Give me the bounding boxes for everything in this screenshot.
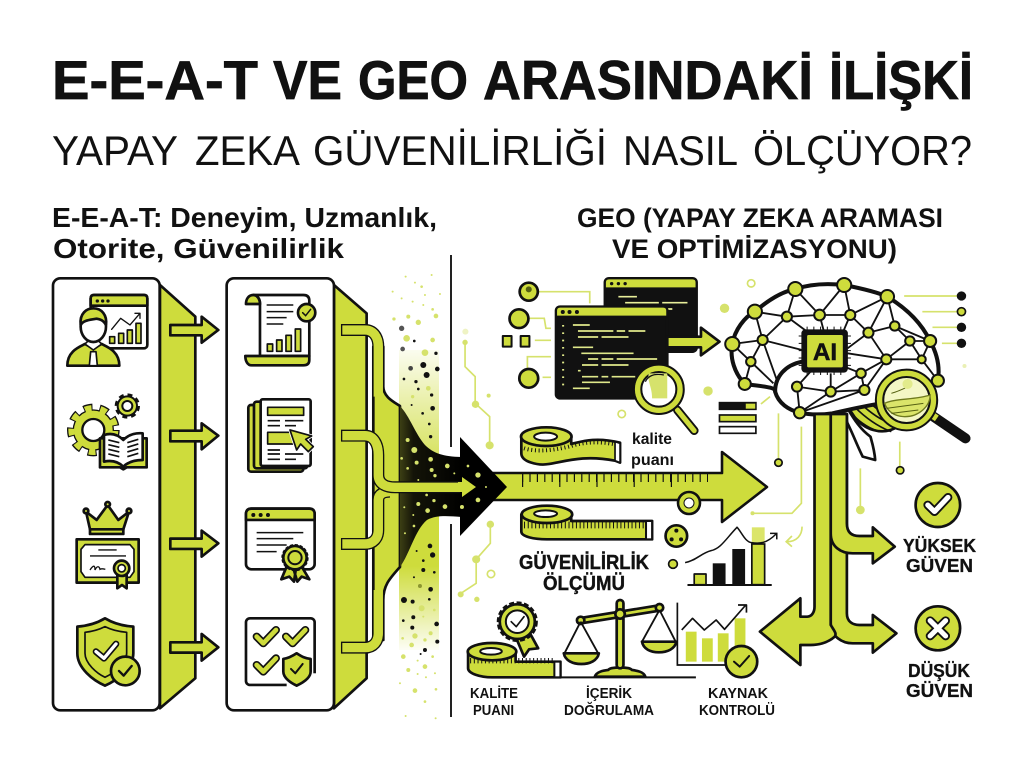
side dots (957, 291, 966, 348)
AI chip (799, 327, 851, 375)
small arrow in funnel (458, 477, 476, 497)
label: düşük güven: GÜVEN (906, 681, 973, 701)
label: içerik doğrulama: İÇERİK (586, 685, 632, 702)
panel 2 (227, 278, 334, 710)
funnel dots (400, 438, 487, 534)
icon: back code window (605, 278, 697, 352)
heading: E-E-A-T: Otorite, Güvenilirlik (53, 233, 344, 264)
subtitle: ÖLÇÜYOR? (753, 127, 972, 174)
subtitle: NASIL (623, 127, 738, 174)
label: kalite puanı (470, 685, 518, 719)
icon: large magnifier on brain (880, 373, 966, 438)
icon: crown and certificate (77, 502, 139, 588)
brain network (732, 285, 938, 413)
title: GEO (358, 49, 468, 111)
label: yüksek güven: GÜVEN (906, 556, 973, 576)
panel 1 flange (160, 285, 195, 708)
divider line (450, 255, 452, 717)
small ring nodes (775, 459, 904, 474)
panel 1 (53, 278, 160, 710)
label: güvenilirlik ölçümü: GÜVENİLİRLİK (519, 551, 650, 574)
icon: shield with check (77, 618, 140, 686)
heading: E-E-A-T (52, 202, 437, 264)
right column, lower artwork (458, 414, 960, 677)
icon: browser with badge (246, 509, 315, 582)
AI chip: AI (813, 339, 837, 366)
icon: dotted circle (666, 525, 687, 568)
brain outline (732, 284, 939, 414)
icon: balance scale (561, 600, 696, 677)
central arrow (400, 437, 767, 536)
label: güvenilirlik ölçümü (519, 551, 650, 595)
icon: tape measure 1 (521, 427, 620, 464)
title: VE (273, 49, 342, 111)
subtitle: YAPAY (52, 127, 178, 174)
title: E-E-A-T (52, 49, 258, 111)
panel 2 flange (334, 285, 367, 708)
title (52, 49, 973, 111)
pipe to left arrow (760, 414, 836, 665)
label: kaynak kontrolü (699, 686, 775, 719)
funnel lime body (373, 347, 400, 640)
label: kalite puanı: KALİTE (470, 685, 518, 702)
icon: tape measure 2 (521, 506, 652, 539)
icon: small nodes (503, 283, 538, 388)
arrows between panels (170, 317, 218, 661)
label: kalite puanı: kalite (632, 431, 672, 448)
icon: analyst and chart (67, 295, 147, 366)
right column, upper artwork (462, 278, 967, 515)
chart: rising bars (685, 527, 777, 585)
icon: front code window (556, 307, 667, 398)
title: ARASINDAKİ (483, 49, 813, 111)
icon: documents with cursor (248, 399, 313, 472)
icon: status bars (719, 403, 756, 433)
pipes (341, 330, 462, 648)
black arrow head (460, 437, 507, 536)
arrow from code to brain (667, 328, 719, 355)
icon: report scroll (245, 295, 315, 365)
left panels and connectors (53, 278, 462, 710)
circuit decorations lower (460, 525, 802, 594)
icon: cross circle, low trust (916, 606, 960, 650)
heading: E-E-A-T: E-E-A-T: Deneyim, Uzmanlık, (52, 202, 437, 233)
label: içerik doğrulama (564, 685, 654, 719)
icon: check circle, high trust (916, 483, 960, 527)
label: kalite puanı (631, 431, 674, 469)
brain with AI chip (725, 278, 944, 460)
title: İLİŞKİ (829, 49, 973, 111)
heading: GEO: VE OPTİMİZASYONU) (612, 234, 897, 264)
particle band (392, 274, 441, 719)
brain nodes (725, 278, 944, 418)
chart: source check (677, 603, 757, 677)
pipe to high trust (831, 414, 895, 563)
label: yüksek güven: YÜKSEK (903, 536, 976, 556)
label: güvenilirlik ölçümü: ÖLÇÜMÜ (543, 572, 625, 595)
label: kalite puanı: puanı (631, 452, 674, 469)
label: düşük güven: DÜŞÜK (908, 661, 970, 681)
label: yüksek güven (903, 536, 976, 576)
label: düşük güven (906, 661, 973, 701)
ruler ticks (522, 474, 708, 482)
heading: GEO: GEO (YAPAY ZEKA ARAMASI (577, 203, 943, 233)
label: kalite puanı: PUANI (473, 703, 514, 719)
pipe to low trust (831, 414, 896, 653)
label: kaynak kontrolü: KAYNAK (708, 686, 769, 702)
label: kaynak kontrolü: KONTROLÜ (699, 702, 775, 719)
icon: checklist with shield (246, 618, 317, 688)
subtitle: GÜVENİLİRLİĞİ (313, 127, 607, 174)
label: içerik doğrulama: DOĞRULAMA (564, 701, 654, 719)
brain cerebellum (832, 403, 905, 460)
subtitle: ZEKA (195, 127, 300, 174)
circuit decorations (465, 280, 957, 513)
heading: GEO (577, 203, 943, 264)
icon: magnifier on code (638, 368, 694, 431)
subtitle (52, 127, 972, 174)
black funnel (400, 406, 462, 567)
icon: gears and book (71, 396, 147, 469)
seal on arrow (678, 492, 700, 514)
three-way pipe arrows (760, 414, 896, 665)
lime measuring arrow (490, 452, 767, 522)
icon: tape with seal (468, 604, 560, 677)
